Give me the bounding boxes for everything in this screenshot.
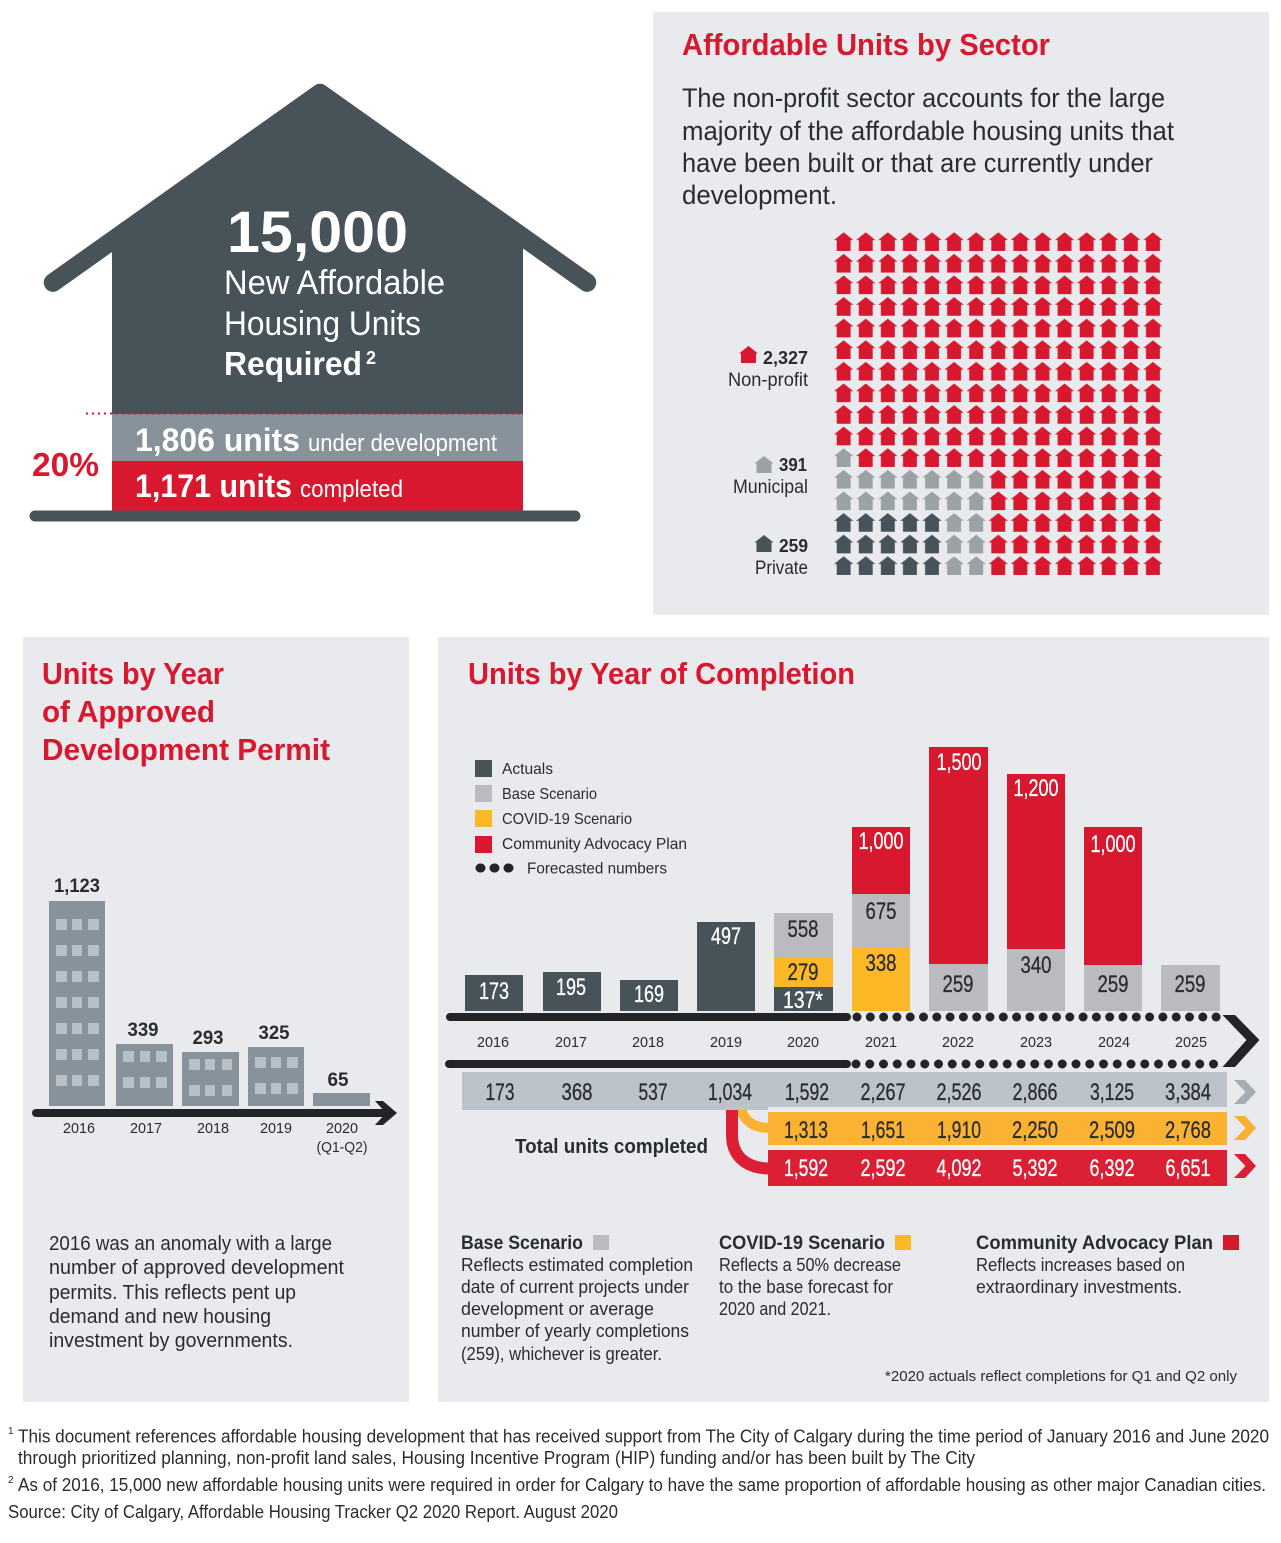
bar chart: buildings: 325 <box>258 1023 290 1044</box>
panel: units by year of completion <box>438 637 1269 1402</box>
bar chart: buildings: 65 <box>328 1070 349 1091</box>
note: base scenario: Base Scenario <box>461 1233 583 1254</box>
note: covid scenario: COVID-19 Scenario <box>719 1233 885 1254</box>
stacked bar chart: 675 <box>866 898 896 925</box>
stacked bar chart: 1,200 <box>1014 775 1058 802</box>
bar chart: buildings: 2018 <box>197 1120 229 1137</box>
bar chart: buildings: 1,123 <box>54 876 100 897</box>
connector lines <box>732 1108 770 1168</box>
completed band <box>112 461 523 511</box>
note: base scenario: (259), whichever is greater. <box>461 1344 662 1364</box>
stacked bar chart: 195 <box>556 974 586 1001</box>
total row: community advocacy plan: 6,392 <box>1090 1155 1134 1182</box>
total row: base scenario: 2,526 <box>936 1079 982 1106</box>
stacked bar chart: 1,000 <box>1090 831 1136 858</box>
intro text: majority of the affordable housing units that <box>682 116 1174 146</box>
note: base scenario: development or average <box>461 1299 654 1319</box>
panel: units by year of approved development permit <box>23 637 409 1402</box>
footnotes <box>8 1426 1269 1522</box>
bar chart: buildings: 2017 <box>130 1120 162 1137</box>
stacked bar chart: 137* <box>783 987 823 1014</box>
headline label <box>224 264 445 382</box>
note: community advocacy plan <box>976 1233 1239 1297</box>
intro text <box>682 83 1174 210</box>
legend: non-profit: Non-profit <box>728 370 809 391</box>
legend: non-profit <box>728 346 809 391</box>
panel: affordable units by sector <box>653 12 1269 615</box>
completed text <box>135 468 403 504</box>
under development band <box>112 414 523 461</box>
explanatory text: permits. This reflects pent up <box>49 1282 296 1304</box>
under development text: under development <box>308 430 497 457</box>
timeline arrow with years <box>449 1015 1260 1067</box>
total row: covid scenario: 2,509 <box>1089 1117 1135 1144</box>
total row: base scenario: 2,267 <box>860 1079 906 1106</box>
bar chart: buildings: 2019 <box>260 1120 292 1137</box>
heading: Development Permit <box>42 732 330 767</box>
note: covid scenario: 2020 and 2021. <box>719 1299 831 1319</box>
legend: Base Scenario <box>502 786 597 803</box>
total row: community advocacy plan: 5,392 <box>1012 1155 1058 1182</box>
note: base scenario: Reflects estimated completion <box>461 1255 693 1275</box>
waffle chart of house icons <box>834 232 1165 578</box>
headline number: 15,000 <box>227 200 408 265</box>
total row: covid scenario: 2,250 <box>1012 1117 1058 1144</box>
timeline arrow with years: 2019 <box>710 1034 742 1051</box>
legend: private: Private <box>755 558 808 579</box>
timeline arrow with years: 2023 <box>1020 1034 1052 1051</box>
stacked bar chart: 340 <box>1020 952 1052 979</box>
note: base scenario <box>461 1233 693 1364</box>
legend: municipal: 391 <box>779 455 807 475</box>
legend: municipal <box>733 455 808 498</box>
footnotes: Source: City of Calgary, Affordable Housing Tracker Q2 2020 Report. August 2020 <box>8 1502 618 1522</box>
total row: community advocacy plan: 2,592 <box>860 1155 906 1182</box>
completed text: completed <box>300 476 403 503</box>
total units label: Total units completed <box>515 1136 708 1158</box>
total row: covid scenario: 1,910 <box>937 1117 981 1144</box>
total row: base scenario: 537 <box>638 1079 668 1106</box>
total row: base scenario <box>462 1072 1256 1110</box>
completed text: 1,171 units <box>135 468 292 504</box>
stacked bar chart: 259 <box>942 971 974 998</box>
headline label: New Affordable <box>224 264 445 302</box>
legend: non-profit: 2,327 <box>763 348 808 368</box>
stacked bar chart: 173 <box>479 978 509 1005</box>
total row: covid scenario: 1,651 <box>861 1117 905 1144</box>
bar chart: buildings: 339 <box>128 1020 158 1041</box>
headline label: Required <box>224 345 362 382</box>
heading <box>42 656 330 767</box>
legend: Forecasted numbers <box>527 860 667 878</box>
note: covid scenario: to the base forecast for <box>719 1277 893 1297</box>
under development text: 1,806 units <box>135 422 300 458</box>
stacked bar chart: 279 <box>788 959 818 986</box>
heading: Affordable Units by Sector <box>682 27 1050 62</box>
stacked bar chart: 1,500 <box>936 749 982 776</box>
note: covid scenario: Reflects a 50% decrease <box>719 1255 901 1275</box>
total row: community advocacy plan: 1,592 <box>784 1155 828 1182</box>
bar chart: buildings: 2016 <box>63 1120 95 1137</box>
footnotes: 2 <box>8 1475 14 1486</box>
bar chart: buildings: (Q1-Q2) <box>316 1139 368 1156</box>
under development text <box>135 422 497 458</box>
explanatory text: investment by governments. <box>49 1330 293 1352</box>
heading: Units by Year of Completion <box>468 656 855 691</box>
stacked bar chart: 558 <box>788 916 818 943</box>
headline label: 2 <box>366 348 376 368</box>
heading: Units by Year <box>42 656 224 691</box>
total row: covid scenario: 1,313 <box>784 1117 828 1144</box>
note: covid scenario <box>719 1233 911 1319</box>
stacked bar chart: 338 <box>866 950 896 977</box>
timeline arrow with years: 2024 <box>1098 1034 1130 1051</box>
note: community advocacy plan: extraordinary investments. <box>976 1277 1182 1297</box>
note: community advocacy plan: Reflects increases based on <box>976 1255 1185 1275</box>
total row: base scenario: 173 <box>486 1079 514 1106</box>
timeline arrow with years: 2017 <box>555 1034 587 1051</box>
stacked bar chart: 169 <box>634 981 664 1008</box>
explanatory text: number of approved development <box>49 1257 344 1279</box>
stacked bar chart <box>465 747 1220 1014</box>
total row: base scenario: 3,125 <box>1090 1079 1134 1106</box>
house graphic: 15,000 units required <box>32 93 587 516</box>
explanatory text: 2016 was an anomaly with a large <box>49 1233 332 1255</box>
20 percent marker line <box>86 412 523 414</box>
total row: covid scenario <box>768 1112 1256 1145</box>
total row: community advocacy plan: 6,651 <box>1166 1155 1210 1182</box>
legend: COVID-19 Scenario <box>502 811 632 828</box>
bar chart: buildings: 293 <box>192 1028 224 1049</box>
total row: base scenario: 368 <box>562 1079 592 1106</box>
20 percent label: 20% <box>32 446 99 483</box>
total row: base scenario: 1,034 <box>708 1079 752 1106</box>
timeline arrow with years: 2021 <box>865 1034 897 1051</box>
legend: municipal: Municipal <box>733 477 808 498</box>
timeline arrow with years: 2018 <box>632 1034 664 1051</box>
stacked bar chart: 259 <box>1098 971 1128 998</box>
footnotes: 1 <box>8 1426 14 1437</box>
asterisk note: *2020 actuals reflect completions for Q1 and Q2 only <box>885 1368 1237 1385</box>
legend: private: 259 <box>779 536 808 556</box>
total row: base scenario: 2,866 <box>1012 1079 1058 1106</box>
explanatory text <box>49 1233 344 1352</box>
legend: private <box>754 535 808 579</box>
timeline arrow with years: 2020 <box>787 1034 819 1051</box>
stacked bar chart: 259 <box>1174 971 1206 998</box>
total row: community advocacy plan <box>768 1150 1256 1186</box>
total row: covid scenario: 2,768 <box>1165 1117 1211 1144</box>
explanatory text: demand and new housing <box>49 1306 271 1328</box>
heading: of Approved <box>42 694 215 729</box>
bar chart: buildings <box>36 876 397 1156</box>
intro text: development. <box>682 180 837 210</box>
intro text: have been built or that are currently under <box>682 148 1153 178</box>
total row: base scenario: 3,384 <box>1165 1079 1211 1106</box>
bar chart: buildings: 2020 <box>326 1120 358 1137</box>
legend <box>475 760 687 878</box>
timeline arrow with years: 2025 <box>1175 1034 1207 1051</box>
intro text: The non-profit sector accounts for the large <box>682 83 1165 113</box>
legend: Actuals <box>502 761 553 778</box>
note: base scenario: date of current projects under <box>461 1277 689 1297</box>
headline label: Housing Units <box>224 305 421 343</box>
timeline arrow with years: 2016 <box>477 1034 509 1051</box>
timeline arrow with years: 2022 <box>942 1034 974 1051</box>
stacked bar chart: 497 <box>711 923 741 950</box>
footnotes: through prioritized planning, non-profit land sales, Housing Incentive Program (HIP) funding and/or has been built by The City <box>18 1448 975 1468</box>
legend: Community Advocacy Plan <box>502 836 687 853</box>
house base line <box>35 510 575 522</box>
total row: base scenario: 1,592 <box>785 1079 829 1106</box>
note: base scenario: number of yearly completions <box>461 1321 689 1341</box>
stacked bar chart: 1,000 <box>858 828 904 855</box>
total row: community advocacy plan: 4,092 <box>936 1155 982 1182</box>
note: community advocacy plan: Community Advocacy Plan <box>976 1233 1213 1254</box>
